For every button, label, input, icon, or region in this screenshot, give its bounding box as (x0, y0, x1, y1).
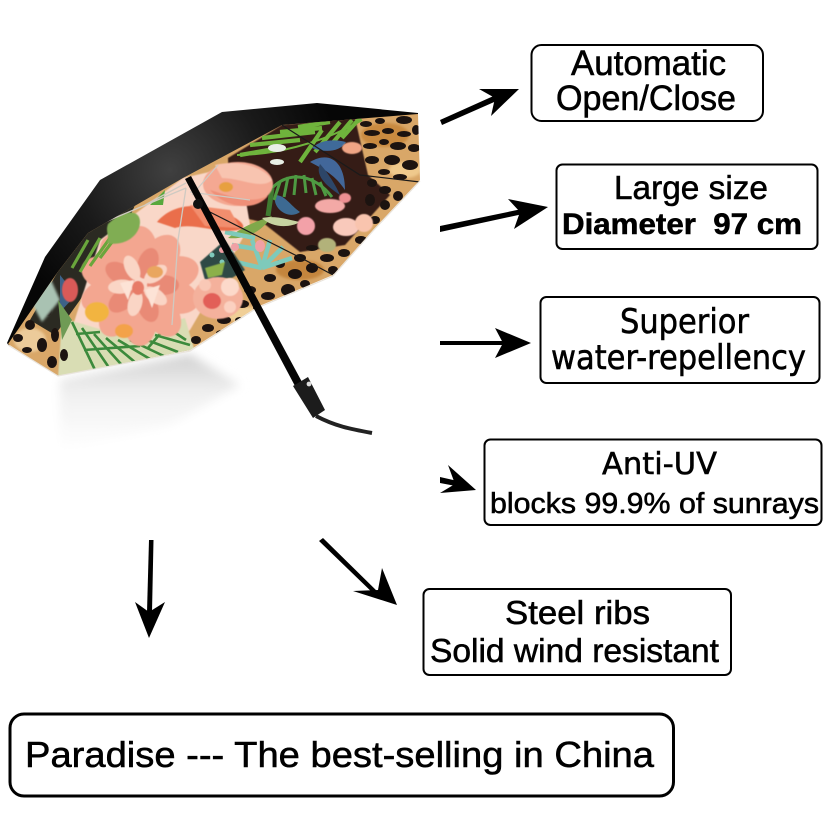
box: steel ribs: Steel ribs (505, 594, 650, 631)
arrow: steel ribs (319, 538, 397, 605)
box: large size: Large size (614, 169, 768, 206)
right pink roses (297, 142, 373, 252)
box: anti-UV: blocks 99.9% of sunrays (490, 488, 819, 520)
ribbon leaves (228, 216, 272, 238)
pale blush base (74, 172, 250, 332)
box: water repellency: water-repellency (551, 338, 806, 378)
shaft (185, 176, 302, 386)
small peony (193, 262, 243, 319)
ribs (105, 165, 250, 325)
box: steel ribs (424, 589, 731, 675)
teal pineapple leaves (225, 232, 292, 268)
box: anti-UV: Anti-UV (602, 447, 717, 482)
arrow: down (135, 540, 165, 638)
dark base panels (228, 118, 390, 252)
box: anti-UV (484, 440, 822, 525)
box: automatic: Automatic (571, 44, 726, 83)
leopard tonal patches (14, 123, 421, 352)
box: large size: Diameter 97 cm (562, 208, 802, 241)
blue leaves (312, 140, 346, 151)
arrow: large size (440, 199, 548, 232)
box: steel ribs: Solid wind resistant (430, 632, 719, 669)
ferns upper left and left leaves (70, 237, 113, 273)
box: water repellency: Superior (620, 302, 749, 342)
umbrella illustration (0, 100, 430, 450)
box: automatic (532, 44, 763, 121)
large peony (77, 226, 203, 346)
canopy outer black (7, 103, 418, 346)
box: automatic: Open/Close (556, 79, 736, 118)
box: water repellency (540, 297, 820, 383)
ground shadow (60, 354, 240, 450)
canopy inner print (8, 114, 420, 376)
box: title (10, 714, 674, 796)
top fern band (237, 118, 362, 162)
handle (293, 377, 325, 418)
bottom fern zone (58, 318, 195, 378)
arrow: anti-UV (440, 465, 476, 493)
upper peony (157, 162, 273, 231)
second fern (268, 175, 332, 216)
arrow: automatic (440, 89, 519, 125)
leopard print spots (13, 116, 420, 368)
white rim (8, 181, 420, 376)
box: large size (556, 164, 818, 249)
arrow: water repellency (440, 328, 531, 358)
box: title: Paradise --- The best-selling in China (25, 734, 655, 775)
strap (316, 416, 372, 433)
